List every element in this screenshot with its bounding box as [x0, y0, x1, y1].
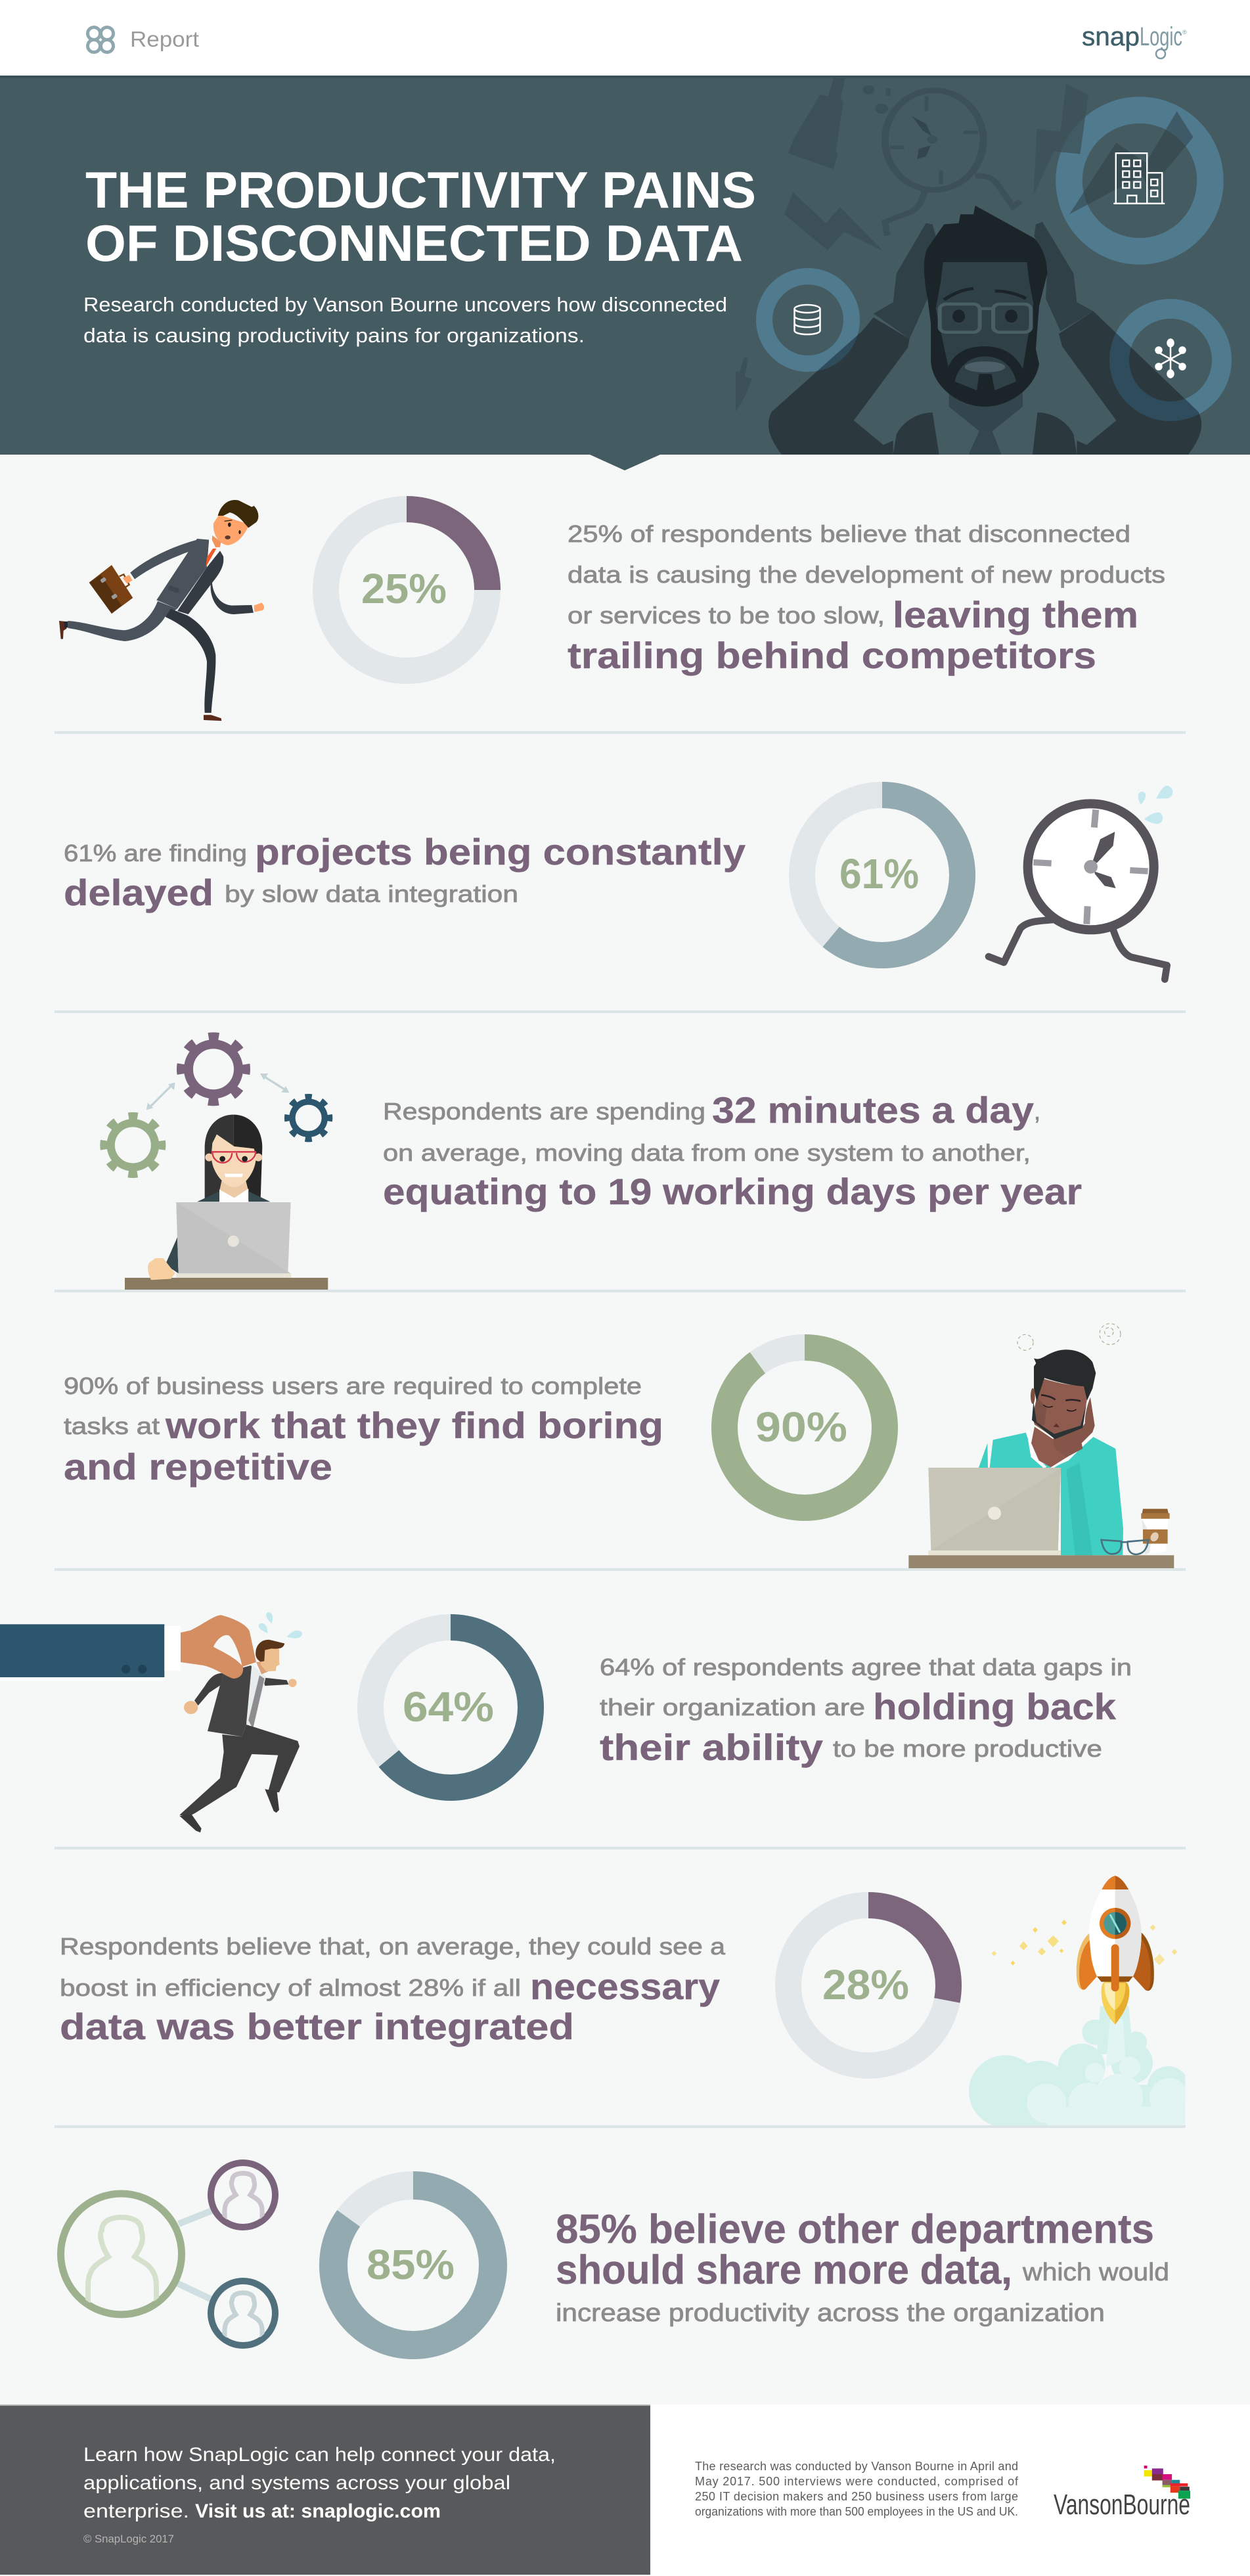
- text block: equating to 19 working days per year: [383, 1171, 1082, 1212]
- text block: their ability: [600, 1727, 823, 1768]
- donut chart: 28%: 28%: [822, 1961, 909, 2008]
- text block: work that they find boring: [165, 1405, 663, 1446]
- illustration: running clock: [989, 786, 1172, 980]
- text block: [600, 1654, 1132, 1768]
- text block: holding back: [873, 1686, 1117, 1727]
- text block: Respondents believe that, on average, they could see a: [60, 1933, 726, 1960]
- text block: [60, 1933, 726, 2047]
- donut chart: 61%: 61%: [839, 850, 919, 897]
- research note: May 2017. 500 interviews were conducted, comprised of: [695, 2475, 1019, 2488]
- text block: [568, 520, 1165, 676]
- donut chart: 28%: [788, 1905, 949, 2066]
- donut chart: 25%: [326, 509, 487, 671]
- text block: tasks at: [64, 1412, 160, 1439]
- donut chart: 85%: [334, 2185, 493, 2345]
- donut chart: 90%: [725, 1347, 885, 1508]
- text block: or services to be too slow,: [568, 602, 885, 629]
- panel: 28 percent efficiency: [60, 1876, 1189, 2127]
- text block: on average, moving data from one system to another,: [383, 1139, 1031, 1166]
- text block: 25% of respondents believe that disconnected: [568, 520, 1130, 547]
- hero illustration: stressed man: [736, 76, 1201, 455]
- icon: navy gear: [288, 1097, 329, 1139]
- text block: ,: [1034, 1098, 1040, 1125]
- text block: 32 minutes a day: [712, 1089, 1034, 1131]
- text block: projects being constantly: [255, 831, 746, 872]
- text block: their organization are: [600, 1694, 865, 1721]
- research note: 250 IT decision makers and 250 business users from large: [695, 2490, 1018, 2503]
- logo: Vanson Bourne: VansonBourne: [1054, 2489, 1190, 2521]
- text block: Respondents are spending: [383, 1098, 705, 1125]
- bottom person: [211, 2281, 275, 2345]
- logo: SnapLogic: snap: [1082, 22, 1140, 51]
- icon: network: [1156, 339, 1185, 377]
- icon: green gear: [104, 1117, 162, 1173]
- footer: [0, 2405, 1190, 2575]
- panel: 64 percent held back: [0, 1612, 1132, 1832]
- donut chart: 64%: [370, 1627, 531, 1788]
- icon: database: [795, 305, 820, 334]
- top person: [211, 2163, 275, 2227]
- hero banner: [0, 76, 1250, 470]
- panel: 85 percent share data: [60, 2163, 1169, 2345]
- text block: 61% are finding: [64, 840, 247, 867]
- text block: 85% believe other departments: [556, 2207, 1154, 2252]
- report label: Report: [130, 27, 199, 51]
- illustration: connected people: [60, 2163, 275, 2345]
- text block: [383, 1089, 1082, 1212]
- text block: data is causing the development of new products: [568, 561, 1165, 588]
- text block: should share more data,: [556, 2248, 1012, 2293]
- panel: call to action: © SnapLogic 2017: [83, 2533, 174, 2545]
- title: OF DISCONNECTED DATA: [85, 214, 743, 272]
- research note: organizations with more than 500 employees in the US and UK.: [695, 2505, 1018, 2518]
- icon: building: [1113, 153, 1165, 204]
- subtitle: Research conducted by Vanson Bourne uncovers how disconnected: [83, 293, 727, 316]
- ring overlap on arms: [818, 332, 1199, 421]
- icon: report clover: [88, 28, 113, 53]
- donut chart: 61%: [802, 795, 962, 955]
- logo: SnapLogic: [1082, 22, 1187, 58]
- panel: call to action: [0, 2405, 650, 2575]
- panel: 32 minutes a day: [104, 1037, 1082, 1291]
- illustration: running businessman with briefcase: [59, 500, 264, 721]
- donut chart: 90%: 90%: [755, 1403, 847, 1451]
- text block: and repetitive: [64, 1446, 332, 1487]
- donut chart: 25%: 25%: [361, 565, 447, 612]
- text block: increase productivity across the organization: [556, 2299, 1105, 2327]
- logo: SnapLogic: Logic: [1140, 22, 1182, 51]
- illustration: bored man at laptop: [908, 1324, 1174, 1569]
- title: THE PRODUCTIVITY PAINS: [85, 161, 756, 219]
- text block: [64, 831, 746, 913]
- text block: leaving them: [893, 594, 1138, 635]
- text block: delayed: [64, 872, 213, 913]
- text block: by slow data integration: [225, 880, 518, 907]
- illustration: rocket launch: [969, 1876, 1189, 2127]
- donut chart: 85%: 85%: [367, 2241, 455, 2288]
- text block: boost in efficiency of almost 28% if all: [60, 1974, 521, 2001]
- panel: call to action: applications, and systems across your global: [83, 2472, 510, 2494]
- panel: 90 percent boring tasks: [64, 1324, 1174, 1569]
- icon: purple gear: [181, 1037, 246, 1101]
- subtitle: [83, 293, 727, 347]
- text block: necessary: [530, 1966, 720, 2007]
- research note: The research was conducted by Vanson Bourne in April and: [695, 2460, 1018, 2473]
- hero pointer: [590, 455, 660, 470]
- text block: data was better integrated: [60, 2006, 574, 2047]
- arrows between gears: [146, 1073, 290, 1110]
- panel: call to action: enterprise.: [83, 2500, 189, 2522]
- big person: [60, 2194, 181, 2315]
- logo: SnapLogic: ®: [1182, 29, 1187, 35]
- text block: [64, 1372, 663, 1487]
- text block: 64% of respondents agree that data gaps in: [600, 1654, 1132, 1681]
- text block: [556, 2207, 1169, 2327]
- illustration: giant hand holding businessman: [0, 1612, 302, 1832]
- title: [85, 161, 756, 272]
- text block: 90% of business users are required to complete: [64, 1372, 642, 1399]
- text block: to be more productive: [833, 1735, 1102, 1762]
- panel: call to action: Visit us at: snaplogic.com: [195, 2500, 441, 2522]
- panel: 25 percent too slow: [59, 500, 1165, 721]
- hero illustration: data rings: [765, 110, 1222, 411]
- research note: [695, 2460, 1019, 2518]
- panel: 61 percent delayed: [64, 786, 1172, 980]
- logo: Vanson Bourne: [1054, 2466, 1190, 2521]
- text block: which would: [1022, 2259, 1169, 2286]
- text block: trailing behind competitors: [568, 635, 1096, 676]
- illustration: stressed woman with gears: [104, 1037, 329, 1291]
- panel: call to action: Learn how SnapLogic can help connect your data,: [83, 2444, 556, 2466]
- donut chart: 64%: 64%: [403, 1683, 494, 1730]
- header bar: [88, 22, 1187, 58]
- subtitle: data is causing productivity pains for organizations.: [83, 324, 585, 347]
